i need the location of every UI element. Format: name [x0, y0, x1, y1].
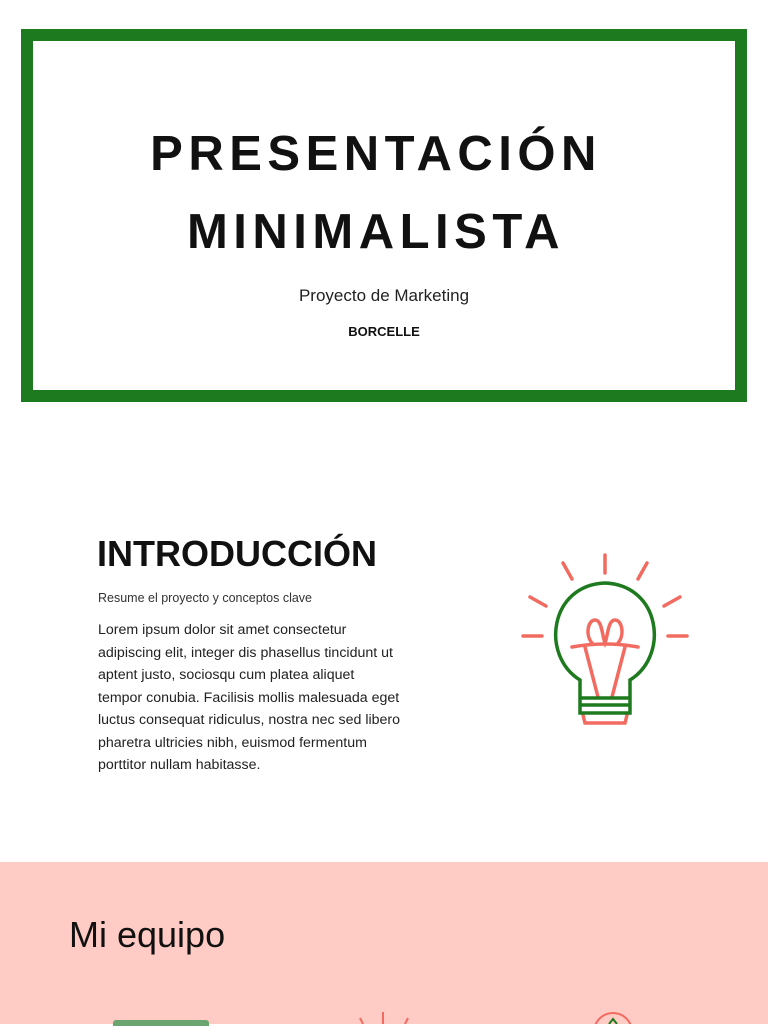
title panel	[21, 29, 747, 402]
intro body: aptent justo, sociosqu cum platea aliquet	[98, 667, 354, 683]
intro subtitle: Resume el proyecto y conceptos clave	[98, 591, 312, 605]
icon: lightbulb	[521, 553, 689, 725]
team icons partially visible	[113, 1020, 209, 1026]
team heading: Mi equipo	[69, 914, 225, 955]
intro body: tempor conubia. Facilisis mollis malesuada eget	[98, 690, 399, 706]
intro body: pharetra ultricies nibh, euismod fermentum	[98, 734, 367, 750]
icon: circle	[594, 1012, 632, 1024]
intro body: adipiscing elit, integer dis phasellus tincidunt ut	[98, 644, 393, 660]
panel: team	[0, 862, 768, 1024]
intro heading: INTRODUCCIÓN	[97, 533, 377, 574]
intro body	[98, 622, 400, 773]
title: PRESENTACIÓN	[150, 127, 602, 181]
title	[150, 126, 602, 259]
intro body: luctus consequat ridiculus, nostra nec sed libero	[98, 712, 400, 728]
icon: red sparkle	[359, 1012, 409, 1024]
brand: BORCELLE	[348, 324, 420, 339]
intro body: Lorem ipsum dolor sit amet consectetur	[98, 622, 346, 638]
title: MINIMALISTA	[187, 205, 565, 259]
intro body: porttitor nullam habitasse.	[98, 757, 260, 773]
subtitle: Proyecto de Marketing	[299, 286, 469, 305]
